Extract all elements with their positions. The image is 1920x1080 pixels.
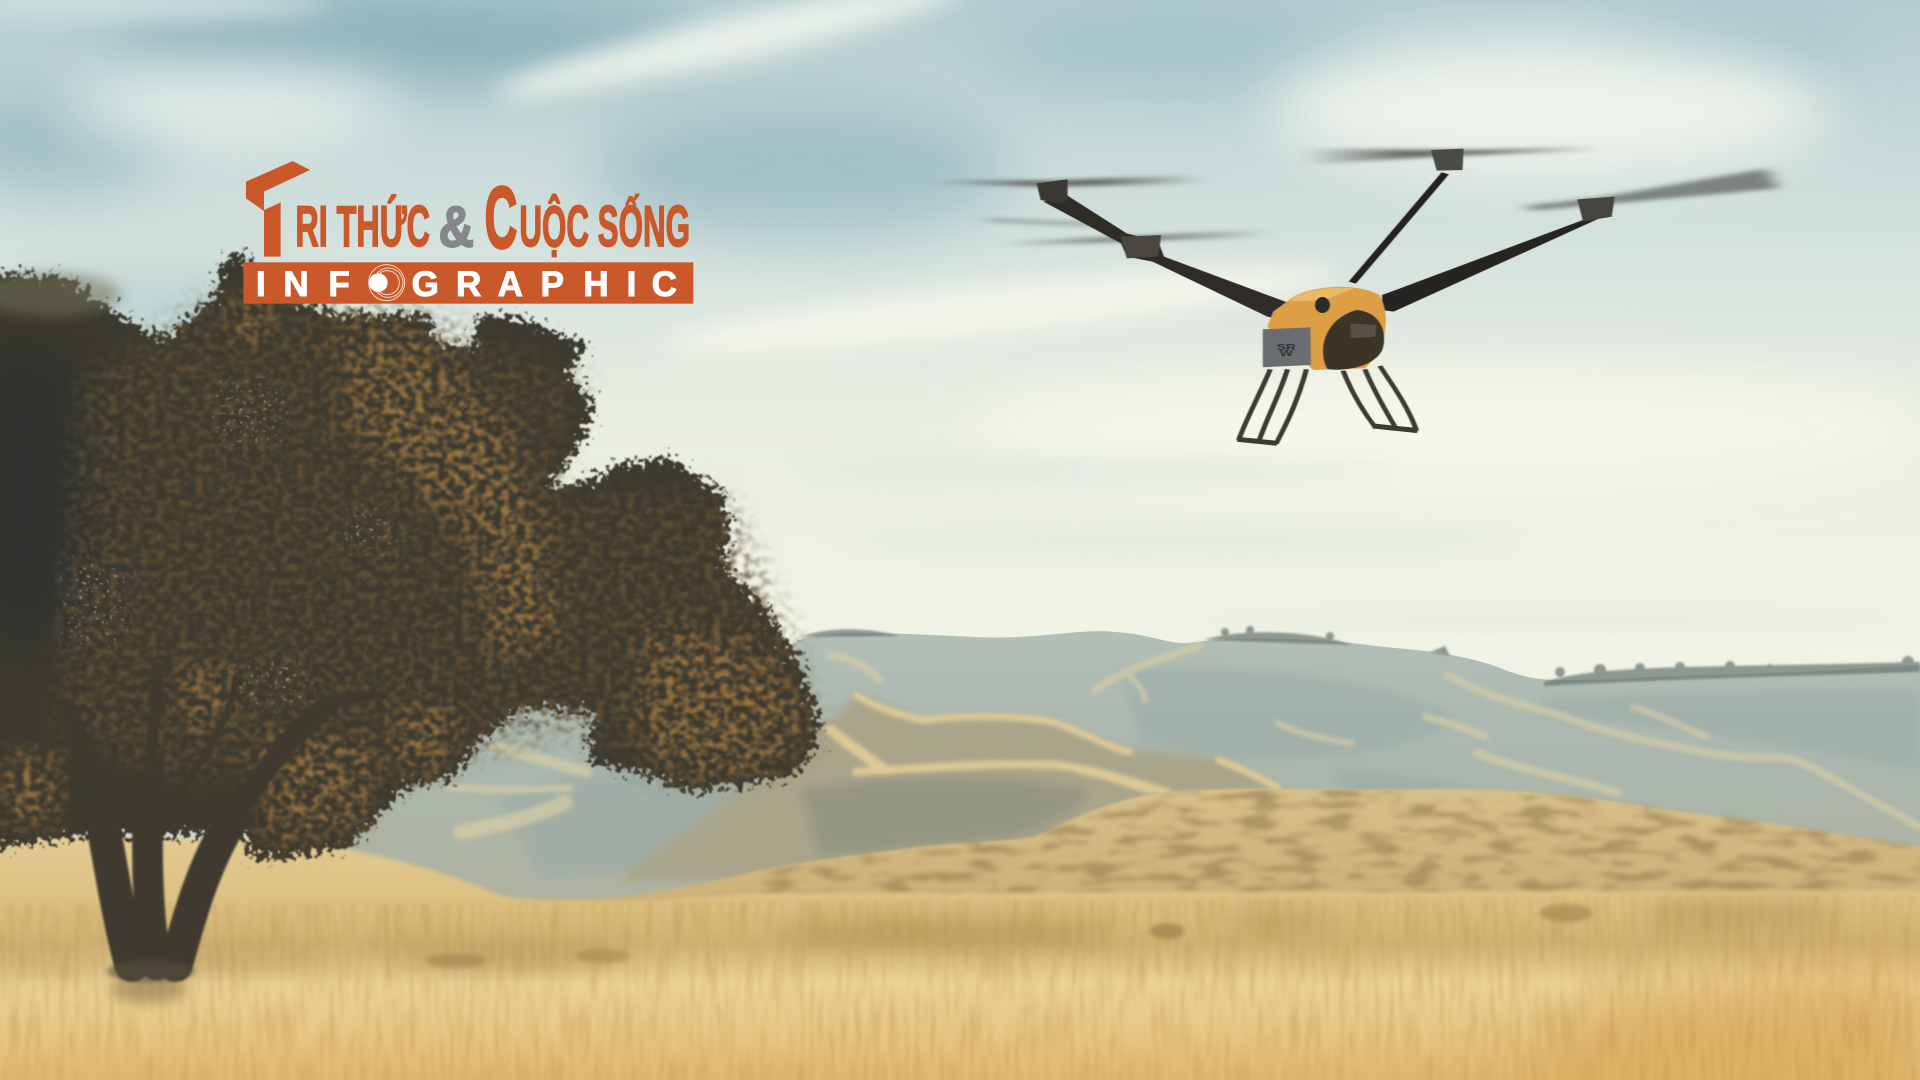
sky background bbox=[0, 0, 1920, 760]
bright ridge lines on tan hills bbox=[830, 695, 1278, 792]
far hazy hills bbox=[300, 626, 1920, 910]
cargo box bbox=[1263, 327, 1311, 367]
box label: SR bbox=[1277, 344, 1296, 352]
box label: W bbox=[1280, 350, 1293, 358]
rotor blur: mid left bbox=[986, 217, 1273, 247]
logo: letter C: C bbox=[485, 168, 517, 266]
logo: Tri Thức & Cuộc Sống Infographic bbox=[243, 161, 693, 304]
arm: left bbox=[1044, 195, 1308, 323]
sensor dot bbox=[1315, 297, 1330, 313]
sky showing through leaves bbox=[66, 379, 395, 708]
canopy blurred top-left haze bbox=[0, 272, 121, 317]
canopy warm highlights bbox=[0, 295, 812, 852]
camera housing bbox=[1323, 310, 1384, 370]
arm: right bbox=[1382, 217, 1603, 312]
landing skid left bbox=[1238, 369, 1306, 444]
motor pods bbox=[1037, 149, 1615, 258]
canopy dark mass bbox=[0, 250, 817, 862]
near golden hill bbox=[500, 789, 1920, 915]
sunlit ridge lines bbox=[450, 645, 1920, 832]
trunk base fade bbox=[107, 960, 195, 982]
foreground grass field bbox=[0, 837, 1920, 1080]
banner letters: INFGRAPHIC bbox=[256, 265, 677, 304]
trunk shadow on grass bbox=[110, 974, 186, 1004]
canopy brown foliage bbox=[55, 295, 812, 777]
dark grass clumps bbox=[425, 904, 1592, 968]
logo: infographic banner bbox=[243, 262, 693, 304]
canopy blurred dark left side bbox=[0, 330, 93, 648]
logo: ampersand: & bbox=[439, 196, 474, 260]
rotor blur: rear bbox=[1302, 146, 1600, 165]
logo: wordmark Cuộc Sống: UỘC SỐNG bbox=[519, 194, 690, 259]
rotor blur: left front bbox=[934, 175, 1204, 187]
rotor blur: right bbox=[1526, 168, 1778, 211]
body shell bbox=[1267, 287, 1386, 370]
darker grass band bbox=[0, 903, 1840, 974]
trunk and limbs bbox=[66, 668, 378, 966]
drone frame bbox=[1037, 149, 1615, 444]
logo: stylised T mark bbox=[246, 161, 310, 257]
landing skid right bbox=[1343, 366, 1418, 431]
hazy shadow folds bbox=[500, 667, 1920, 880]
banner target icon bbox=[369, 265, 405, 301]
arm: rear bbox=[1352, 173, 1445, 283]
logo: wordmark Tri Thức: RI THỨC bbox=[295, 195, 430, 259]
mid tan hills bbox=[620, 693, 1278, 880]
oak tree bbox=[0, 250, 817, 1004]
tree line on ridge bbox=[800, 626, 1920, 686]
box label bbox=[1277, 344, 1296, 358]
drone bbox=[934, 146, 1778, 444]
